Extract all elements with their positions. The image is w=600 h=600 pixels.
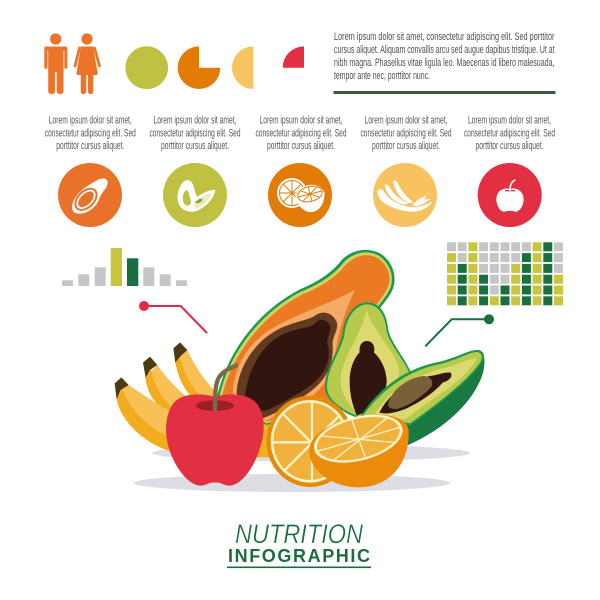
illustration: bananas	[115, 342, 272, 457]
text block: column 5	[464, 114, 555, 152]
title	[227, 519, 371, 568]
text block: column 5: Lorem ipsum dolor sit amet,	[468, 114, 551, 126]
text block: column 1: Lorem ipsum dolor sit amet,	[49, 114, 132, 126]
ground shadows	[134, 444, 470, 492]
text block: column 4: consectetur adipiscing elit. Sed	[360, 128, 452, 140]
text block: column 5: porttitor cursus aliquet.	[476, 140, 544, 152]
illustration: avocado half, lying	[361, 350, 484, 445]
text block: intro paragraph: tempor ante nec, porttitor nunc.	[334, 70, 430, 82]
callout line: green	[425, 314, 494, 346]
icon: orange badge	[268, 163, 332, 227]
pie icon: three quarters	[178, 46, 220, 89]
pie icon: quarter	[283, 46, 304, 68]
illustration: apple	[166, 365, 264, 486]
text block: column 1: consectetur adipiscing elit. Sed	[45, 128, 136, 140]
icon: bananas badge	[373, 163, 437, 227]
bar chart	[62, 248, 187, 286]
text block: column 1	[45, 114, 136, 152]
icon: man	[44, 33, 67, 94]
icon: apple badge	[478, 163, 542, 227]
text block: column 4	[360, 114, 452, 152]
icon: papaya badge	[58, 163, 122, 227]
text block: column 4: Lorem ipsum dolor sit amet,	[364, 114, 448, 126]
text block: column 2: Lorem ipsum dolor sit amet,	[154, 114, 236, 126]
text block: column 2: consectetur adipiscing elit. Sed	[150, 128, 240, 140]
text block: intro paragraph	[334, 31, 555, 82]
illustration: papaya	[217, 250, 395, 425]
icon: avocado badge	[163, 163, 227, 227]
text block: column 3: Lorem ipsum dolor sit amet,	[260, 114, 342, 126]
text block: column 1: porttitor cursus aliquet.	[56, 140, 124, 152]
text block: column 2	[150, 114, 240, 152]
illustration: orange, cut half	[309, 406, 409, 487]
text block: column 4: porttitor cursus aliquet.	[372, 140, 440, 152]
text block: column 3: consectetur adipiscing elit. Sed	[256, 128, 346, 140]
pie icon: half	[232, 46, 253, 89]
text block: column 2: porttitor cursus aliquet.	[161, 140, 229, 152]
callout line: red	[139, 301, 207, 333]
icon: woman	[75, 33, 100, 94]
title: INFOGRAPHIC	[228, 546, 370, 566]
divider bar	[334, 91, 556, 94]
pie icon: full circle	[125, 46, 168, 89]
illustration: avocado half, upright	[325, 302, 413, 425]
grid chart	[447, 242, 563, 305]
text block: column 3	[256, 114, 346, 152]
illustration: orange, whole slice	[266, 396, 354, 487]
title: NUTRITION	[235, 519, 363, 549]
text block: column 3: porttitor cursus aliquet.	[267, 140, 335, 152]
